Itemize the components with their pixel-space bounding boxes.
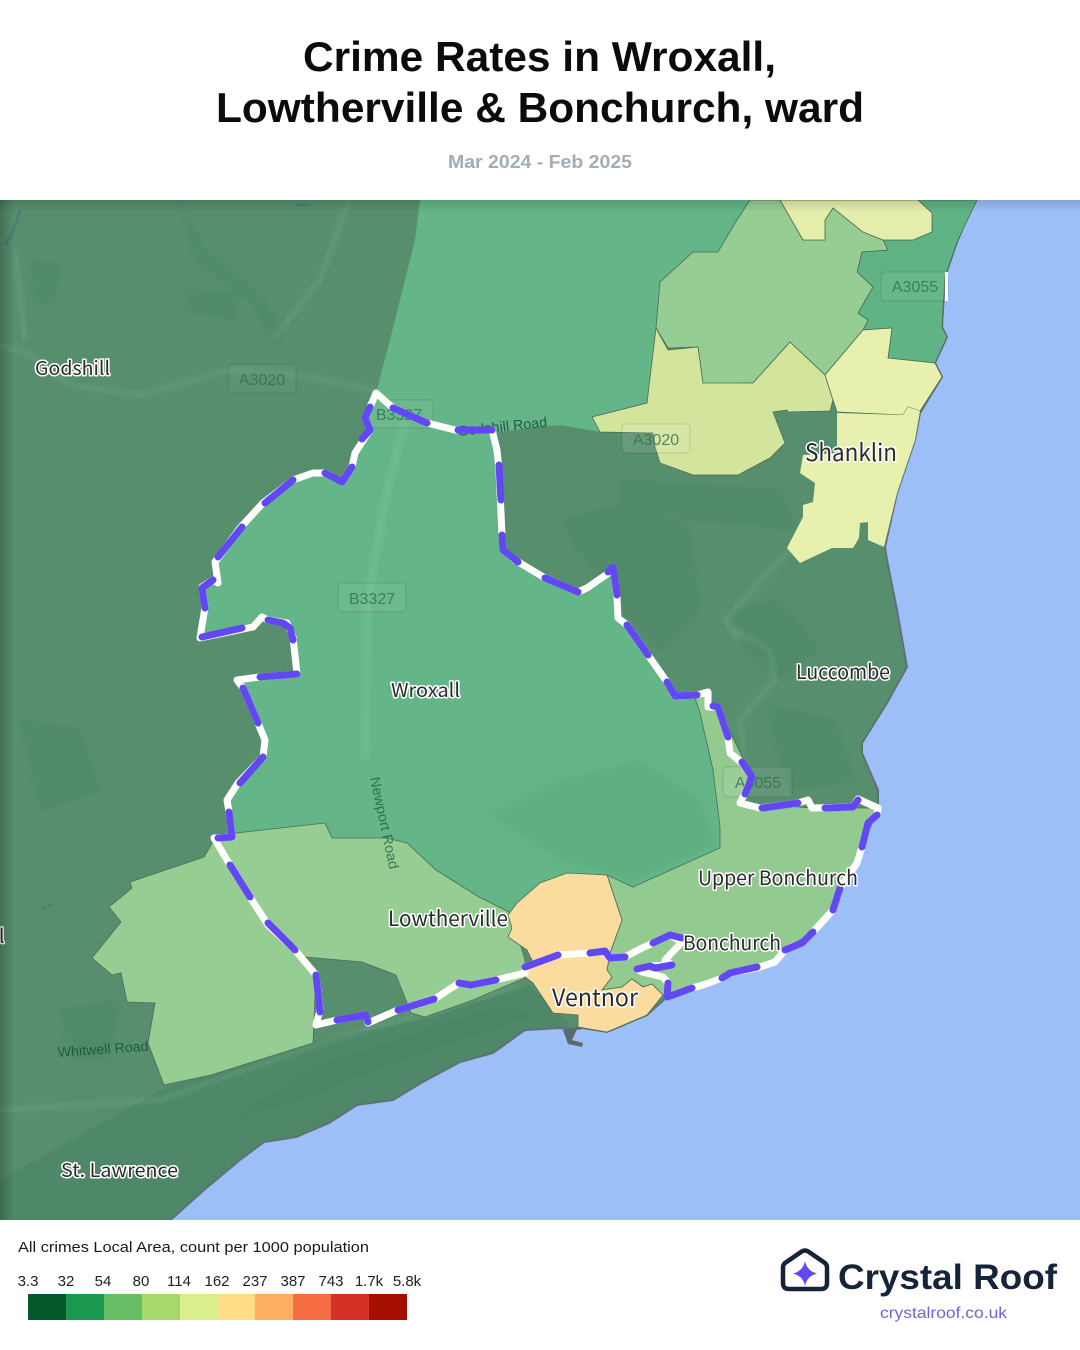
legend scale numbers: 3.3: [18, 1273, 38, 1290]
legend scale numbers: 114: [167, 1273, 191, 1290]
website url: crystalroof.co.uk: [880, 1305, 1008, 1322]
logo: Crystal Roof: [783, 1250, 1057, 1322]
road shield: A3055 north: [881, 272, 948, 301]
label: Ventnor: Ventnor: [552, 978, 639, 1013]
land base: dark green low-crime area: [0, 200, 906, 1180]
label: St. Lawrence: St. Lawrence: [61, 1156, 178, 1183]
road shield: B3327 Wroxall: [338, 583, 406, 612]
wordmark: Crystal Roof: [838, 1258, 1057, 1297]
label: Wroxall: Wroxall: [391, 676, 460, 703]
legend scale numbers: 162: [204, 1273, 230, 1290]
road shield: A3055 north: A3055: [892, 279, 938, 296]
choropleth: Ventnor orange area: [508, 873, 663, 1032]
choropleth: pale yellow north Shanklin: [825, 328, 942, 415]
title: Lowtherville & Bonchurch, ward: [216, 84, 864, 131]
choropleth: Wroxall and northern medium-green area: [200, 200, 750, 913]
map edge shading: [0, 200, 1080, 1220]
legend scale numbers: 54: [95, 1273, 111, 1290]
label: Upper Bonchurch: Upper Bonchurch: [698, 862, 858, 891]
legend scale numbers: 743: [318, 1273, 344, 1290]
label: Luccombe: Luccombe: [796, 656, 890, 685]
minor roads: [140, 328, 774, 1102]
legend scale numbers: 1.7k: [355, 1273, 384, 1290]
road shield: A3020 west: A3020: [239, 372, 285, 389]
legend title: All crimes Local Area, count per 1000 population: [18, 1239, 369, 1256]
ward terrain and road texture: [365, 420, 715, 880]
legend scale numbers: [18, 1273, 422, 1290]
road shield: A3020 east: [622, 424, 690, 453]
map: [0, 195, 1080, 1225]
choropleth: yellow area north of Sandown road: [780, 200, 932, 240]
legend scale numbers: 387: [280, 1273, 306, 1290]
choropleth: medium-green A3055 area: [857, 200, 977, 363]
legend scale numbers: 5.8k: [393, 1273, 422, 1290]
legend: [18, 1239, 422, 1320]
legend scale numbers: 32: [58, 1273, 74, 1290]
label: Bonchurch: Bonchurch: [683, 927, 781, 956]
icon: house with star: [783, 1250, 827, 1289]
choropleth: Lowtherville light-green area: [92, 823, 525, 1085]
road label: Godshill Road: Godshill Road: [457, 414, 548, 439]
choropleth: Upper Bonchurch light-green area: [602, 692, 878, 997]
road label: Newport Road: Newport Road: [367, 775, 402, 871]
legend scale numbers: 80: [133, 1273, 149, 1290]
boundary: white outline: [200, 393, 878, 1025]
title: Crime Rates in Wroxall,: [303, 33, 776, 80]
road label: Whitwell Road: Whitwell Road: [57, 1038, 149, 1060]
subtitle: date range: Mar 2024 - Feb 2025: [448, 152, 632, 172]
boundary: purple dashes: [202, 407, 877, 1022]
legend scale numbers: 237: [242, 1273, 268, 1290]
stream and ponds: [5, 205, 310, 908]
ward boundary: [200, 393, 878, 1025]
label: Godshill: Godshill: [35, 354, 110, 381]
place labels: [0, 354, 897, 1183]
title: [216, 33, 864, 131]
choropleth: yellow-green A3020 area: [592, 328, 833, 475]
label: Shanklin: Shanklin: [805, 433, 897, 468]
road shield: A3020 west: [228, 364, 296, 393]
road shield: A3055 south: [723, 767, 792, 797]
choropleth: light-green north area: [656, 200, 888, 384]
Ventnor pier: [563, 1027, 583, 1047]
legend colour bar: [28, 1294, 407, 1320]
terrain texture: [20, 200, 855, 1120]
road shield: B3327 north: B3327: [376, 407, 422, 424]
road shield: B3327 Wroxall: B3327: [349, 591, 395, 608]
road shield: A3055 south: A3055: [735, 775, 781, 792]
road shield: A3020 east: A3020: [633, 432, 679, 449]
label: Lowtherville: Lowtherville: [388, 903, 508, 933]
sea: [165, 195, 1080, 1225]
road shield: B3327 north: [365, 400, 433, 428]
choropleth: pale yellow south Shanklin: [787, 407, 920, 563]
southern undercliff darker strip: [14, 1006, 466, 1172]
